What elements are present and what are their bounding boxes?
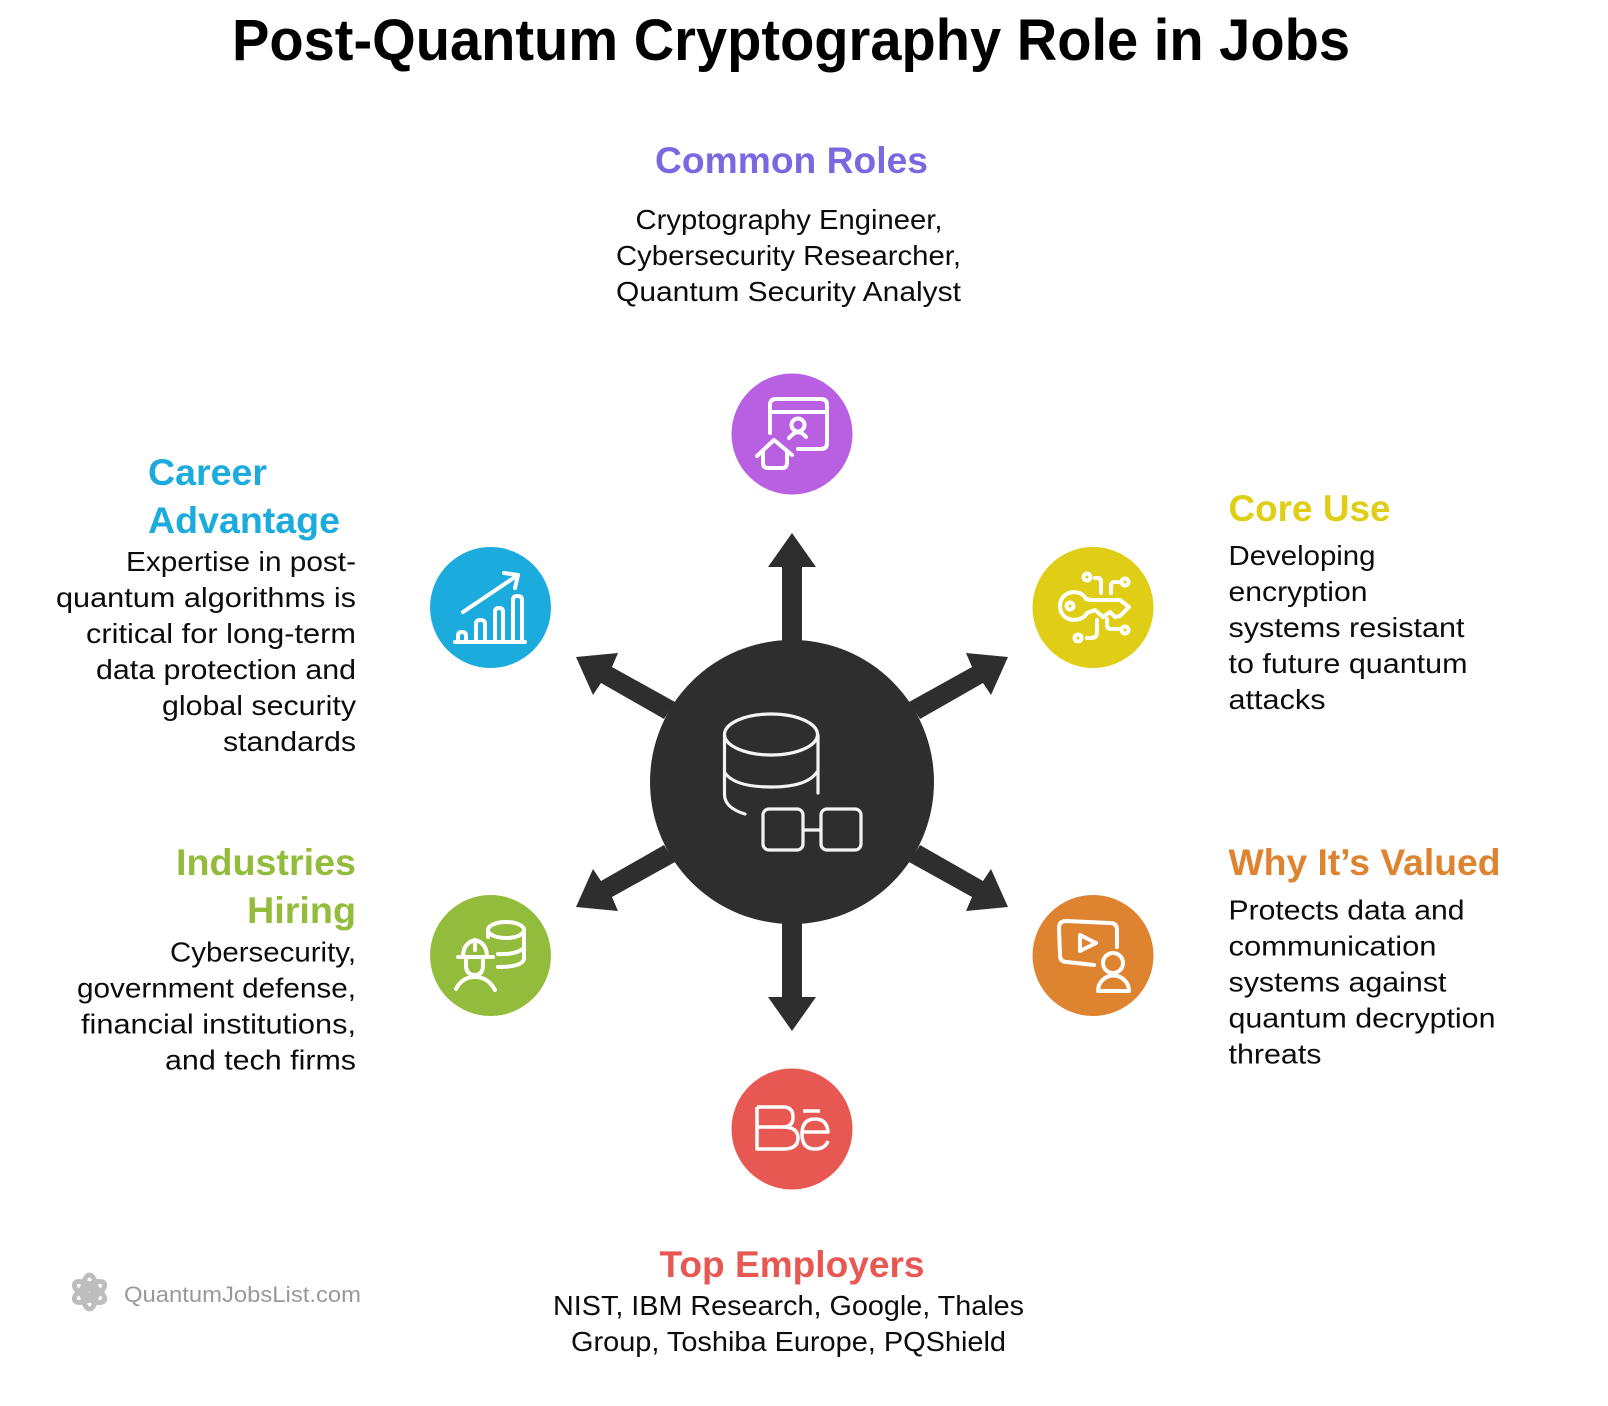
panel: why it's valued text: systems against	[1228, 966, 1447, 998]
panel: industries hiring text: financial institutions,	[81, 1008, 356, 1040]
panel: common roles text	[616, 140, 961, 307]
panel: industries hiring text: and tech firms	[165, 1044, 356, 1076]
panel: top employers text: Top Employers	[660, 1244, 924, 1285]
panel: core use text: attacks	[1228, 684, 1326, 715]
icon: career advantage, rising bar chart	[430, 547, 551, 668]
panel: core use text: systems resistant	[1228, 612, 1465, 643]
icon: why it's valued, video presenter	[1032, 895, 1154, 1016]
panel: common roles text: Common Roles	[655, 140, 928, 181]
panel: core use text: encryption	[1228, 576, 1368, 607]
panel: career advantage text: Career	[148, 452, 267, 493]
logo: QuantumJobsList.com	[71, 1275, 361, 1309]
panel: career advantage text: data protection and	[96, 654, 356, 685]
title: Post-Quantum Cryptography Role in Jobs	[232, 8, 1350, 73]
panel: why it's valued text: communication	[1228, 930, 1436, 962]
panel: industries hiring text: Hiring	[247, 890, 356, 931]
panel: top employers text	[553, 1244, 1024, 1357]
panel: career advantage text	[56, 452, 356, 757]
panel: industries hiring text: government defense,	[77, 972, 356, 1004]
panel: core use text: to future quantum	[1228, 648, 1468, 679]
panel: career advantage text: Advantage	[148, 500, 340, 541]
icon: top employers, behance mark	[732, 1068, 852, 1190]
panel: why it's valued text: Why It’s Valued	[1228, 842, 1500, 883]
logo: QuantumJobsList.com: QuantumJobsList.com	[124, 1282, 361, 1307]
panel: core use text: Developing	[1228, 540, 1376, 571]
icon: industries hiring, worker and data stack	[430, 895, 551, 1016]
arrows radiating from hub	[576, 533, 1008, 1031]
panel: industries hiring text: Industries	[176, 842, 356, 883]
panel: industries hiring text: Cybersecurity,	[170, 936, 356, 968]
central hub with database and glasses icon	[650, 640, 934, 924]
panel: core use text	[1228, 488, 1468, 715]
icon: atom	[71, 1275, 108, 1309]
panel: career advantage text: critical for long-term	[86, 618, 356, 649]
panel: why it's valued text: threats	[1228, 1038, 1322, 1070]
panel: common roles text: Cybersecurity Researcher,	[616, 240, 961, 271]
panel: industries hiring text	[77, 842, 356, 1076]
panel: career advantage text: global security	[162, 690, 356, 721]
panel: core use text: Core Use	[1228, 488, 1390, 529]
panel: top employers text: NIST, IBM Research, Google, Thales	[553, 1290, 1024, 1321]
icon: common roles, window and house	[732, 374, 852, 494]
icon: core use, digital key	[1032, 547, 1154, 668]
panel: top employers text: Group, Toshiba Europe, PQShield	[571, 1326, 1006, 1357]
panel: why it's valued text: quantum decryption	[1228, 1002, 1496, 1034]
panel: career advantage text: Expertise in post-	[126, 546, 356, 577]
panel: career advantage text: standards	[223, 726, 356, 757]
panel: career advantage text: quantum algorithms is	[56, 582, 356, 613]
panel: common roles text: Quantum Security Analyst	[616, 276, 961, 307]
panel: why it's valued text: Protects data and	[1228, 894, 1464, 926]
panel: common roles text: Cryptography Engineer,	[636, 204, 942, 235]
panel: why it's valued text	[1228, 842, 1500, 1070]
